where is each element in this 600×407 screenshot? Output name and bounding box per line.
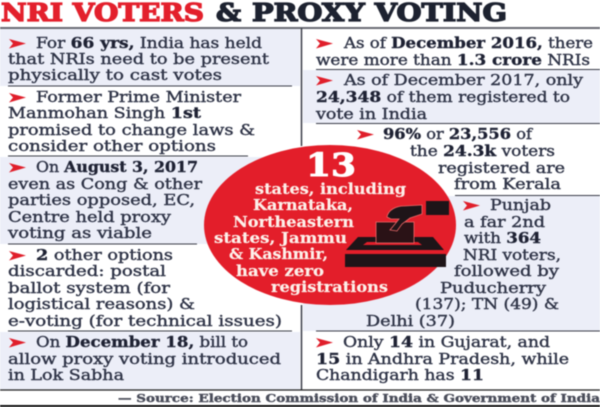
callout text: states, including xyxy=(255,180,407,198)
text block: right bullet 1: As of December 2016, there xyxy=(343,34,593,52)
text block: left bullet 3: On August 3, 2017 xyxy=(36,158,198,176)
panel: right column bands xyxy=(303,70,600,331)
text block: right bullet 4: followed by xyxy=(454,262,560,280)
text block: left bullet 3: parties opposed, EC, xyxy=(8,191,195,209)
callout text: states, Jammu xyxy=(214,229,347,247)
callout text: Northeastern xyxy=(233,213,354,231)
text block: left bullet 3: voting as viable xyxy=(7,224,152,242)
text block: right bullet 2: 24,348 of them registered to xyxy=(316,88,570,106)
text block: right bullet 2: As of December 2017, only xyxy=(343,71,584,89)
bottom edge bar xyxy=(0,405,600,407)
text block: right bullet 5 xyxy=(316,333,569,384)
text block: right bullet 4: with 364 xyxy=(464,229,541,247)
text block: left bullet 2: consider other options xyxy=(8,137,216,155)
text block: left bullet 3 xyxy=(7,158,203,242)
text block: right bullet 4: Punjab xyxy=(490,196,551,214)
text block: left bullet 2: promised to change laws & xyxy=(8,121,255,139)
text block: left bullet 5 xyxy=(8,333,281,384)
panel: left column bands xyxy=(0,29,300,390)
text block: left bullet 5: allow proxy voting introduced xyxy=(8,350,281,368)
text block: right bullet 4: Delhi (37) xyxy=(366,312,455,330)
text block: left bullet 4: e-voting (for technical issues) xyxy=(8,312,282,330)
text block: right bullet 3 xyxy=(357,125,565,193)
callout text xyxy=(214,180,407,296)
callout text: registrations xyxy=(271,278,388,296)
text block: left bullet 5: in Lok Sabha xyxy=(8,366,124,384)
text block: right bullet 1: were more than 1.3 crore NRIs xyxy=(316,51,590,69)
callout text: Karnataka, xyxy=(253,196,353,214)
text block: right bullet 3: the 24.3k voters xyxy=(410,142,555,160)
text block: right bullet 4: a far 2nd xyxy=(464,213,545,231)
text block: right bullet 4 xyxy=(366,196,561,330)
text block: right bullet 3: 96% or 23,556 of xyxy=(383,125,534,143)
text block: left bullet 1: For 66 yrs, India has held xyxy=(36,34,262,52)
text block: right bullet 5: Chandigarh has 11 xyxy=(316,366,484,384)
text block: left bullet 1 xyxy=(8,34,269,84)
text block: right bullet 3: registered are xyxy=(438,159,565,177)
text block: right bullet 2 xyxy=(315,71,584,123)
text block: right bullet 4: Puducherry xyxy=(440,279,547,297)
callout text: & Kashmir, xyxy=(229,245,328,263)
text block: right bullet 4: (137); TN (49) & xyxy=(415,295,559,313)
icon: ballot box xyxy=(345,201,449,267)
callout number 13: 13 xyxy=(306,146,356,184)
text block: left bullet 4 xyxy=(8,246,282,330)
callout text: have zero xyxy=(236,262,324,280)
text block: left bullet 3: even as Cong & other xyxy=(8,175,203,193)
text block: left bullet 4: discarded: postal xyxy=(8,262,166,280)
text block: right bullet 2: vote in India xyxy=(315,105,427,123)
text block: left bullet 2: Former Prime Minister xyxy=(36,88,242,106)
text block: left bullet 2: Manmohan Singh 1st xyxy=(8,104,201,122)
text block: left bullet 4: 2 other options xyxy=(36,246,173,264)
text block: right bullet 3: from Kerala xyxy=(454,175,561,193)
text block: left bullet 4: ballot system (for xyxy=(8,279,171,297)
source line: — Source: Election Commission of India & Government of India xyxy=(118,391,600,405)
text block: right bullet 4: NRI voters, xyxy=(463,246,561,264)
text block: left bullet 1: that NRIs need to be present xyxy=(8,50,269,68)
title xyxy=(1,0,507,27)
text block: left bullet 1: physically to cast votes xyxy=(8,66,222,84)
callout: red circle xyxy=(204,145,456,305)
text block: right bullet 5: Only 14 in Gujarat, and xyxy=(343,333,550,351)
text block: left bullet 4: logistical reasons) & xyxy=(8,295,195,313)
text block: left bullet 2 xyxy=(8,88,255,155)
text block: left bullet 3: Centre held proxy xyxy=(8,208,172,226)
text block: right bullet 1 xyxy=(316,34,593,69)
text block: right bullet 5: 15 in Andhra Pradesh, while xyxy=(316,350,569,368)
text block: left bullet 5: On December 18, bill to xyxy=(36,333,248,351)
